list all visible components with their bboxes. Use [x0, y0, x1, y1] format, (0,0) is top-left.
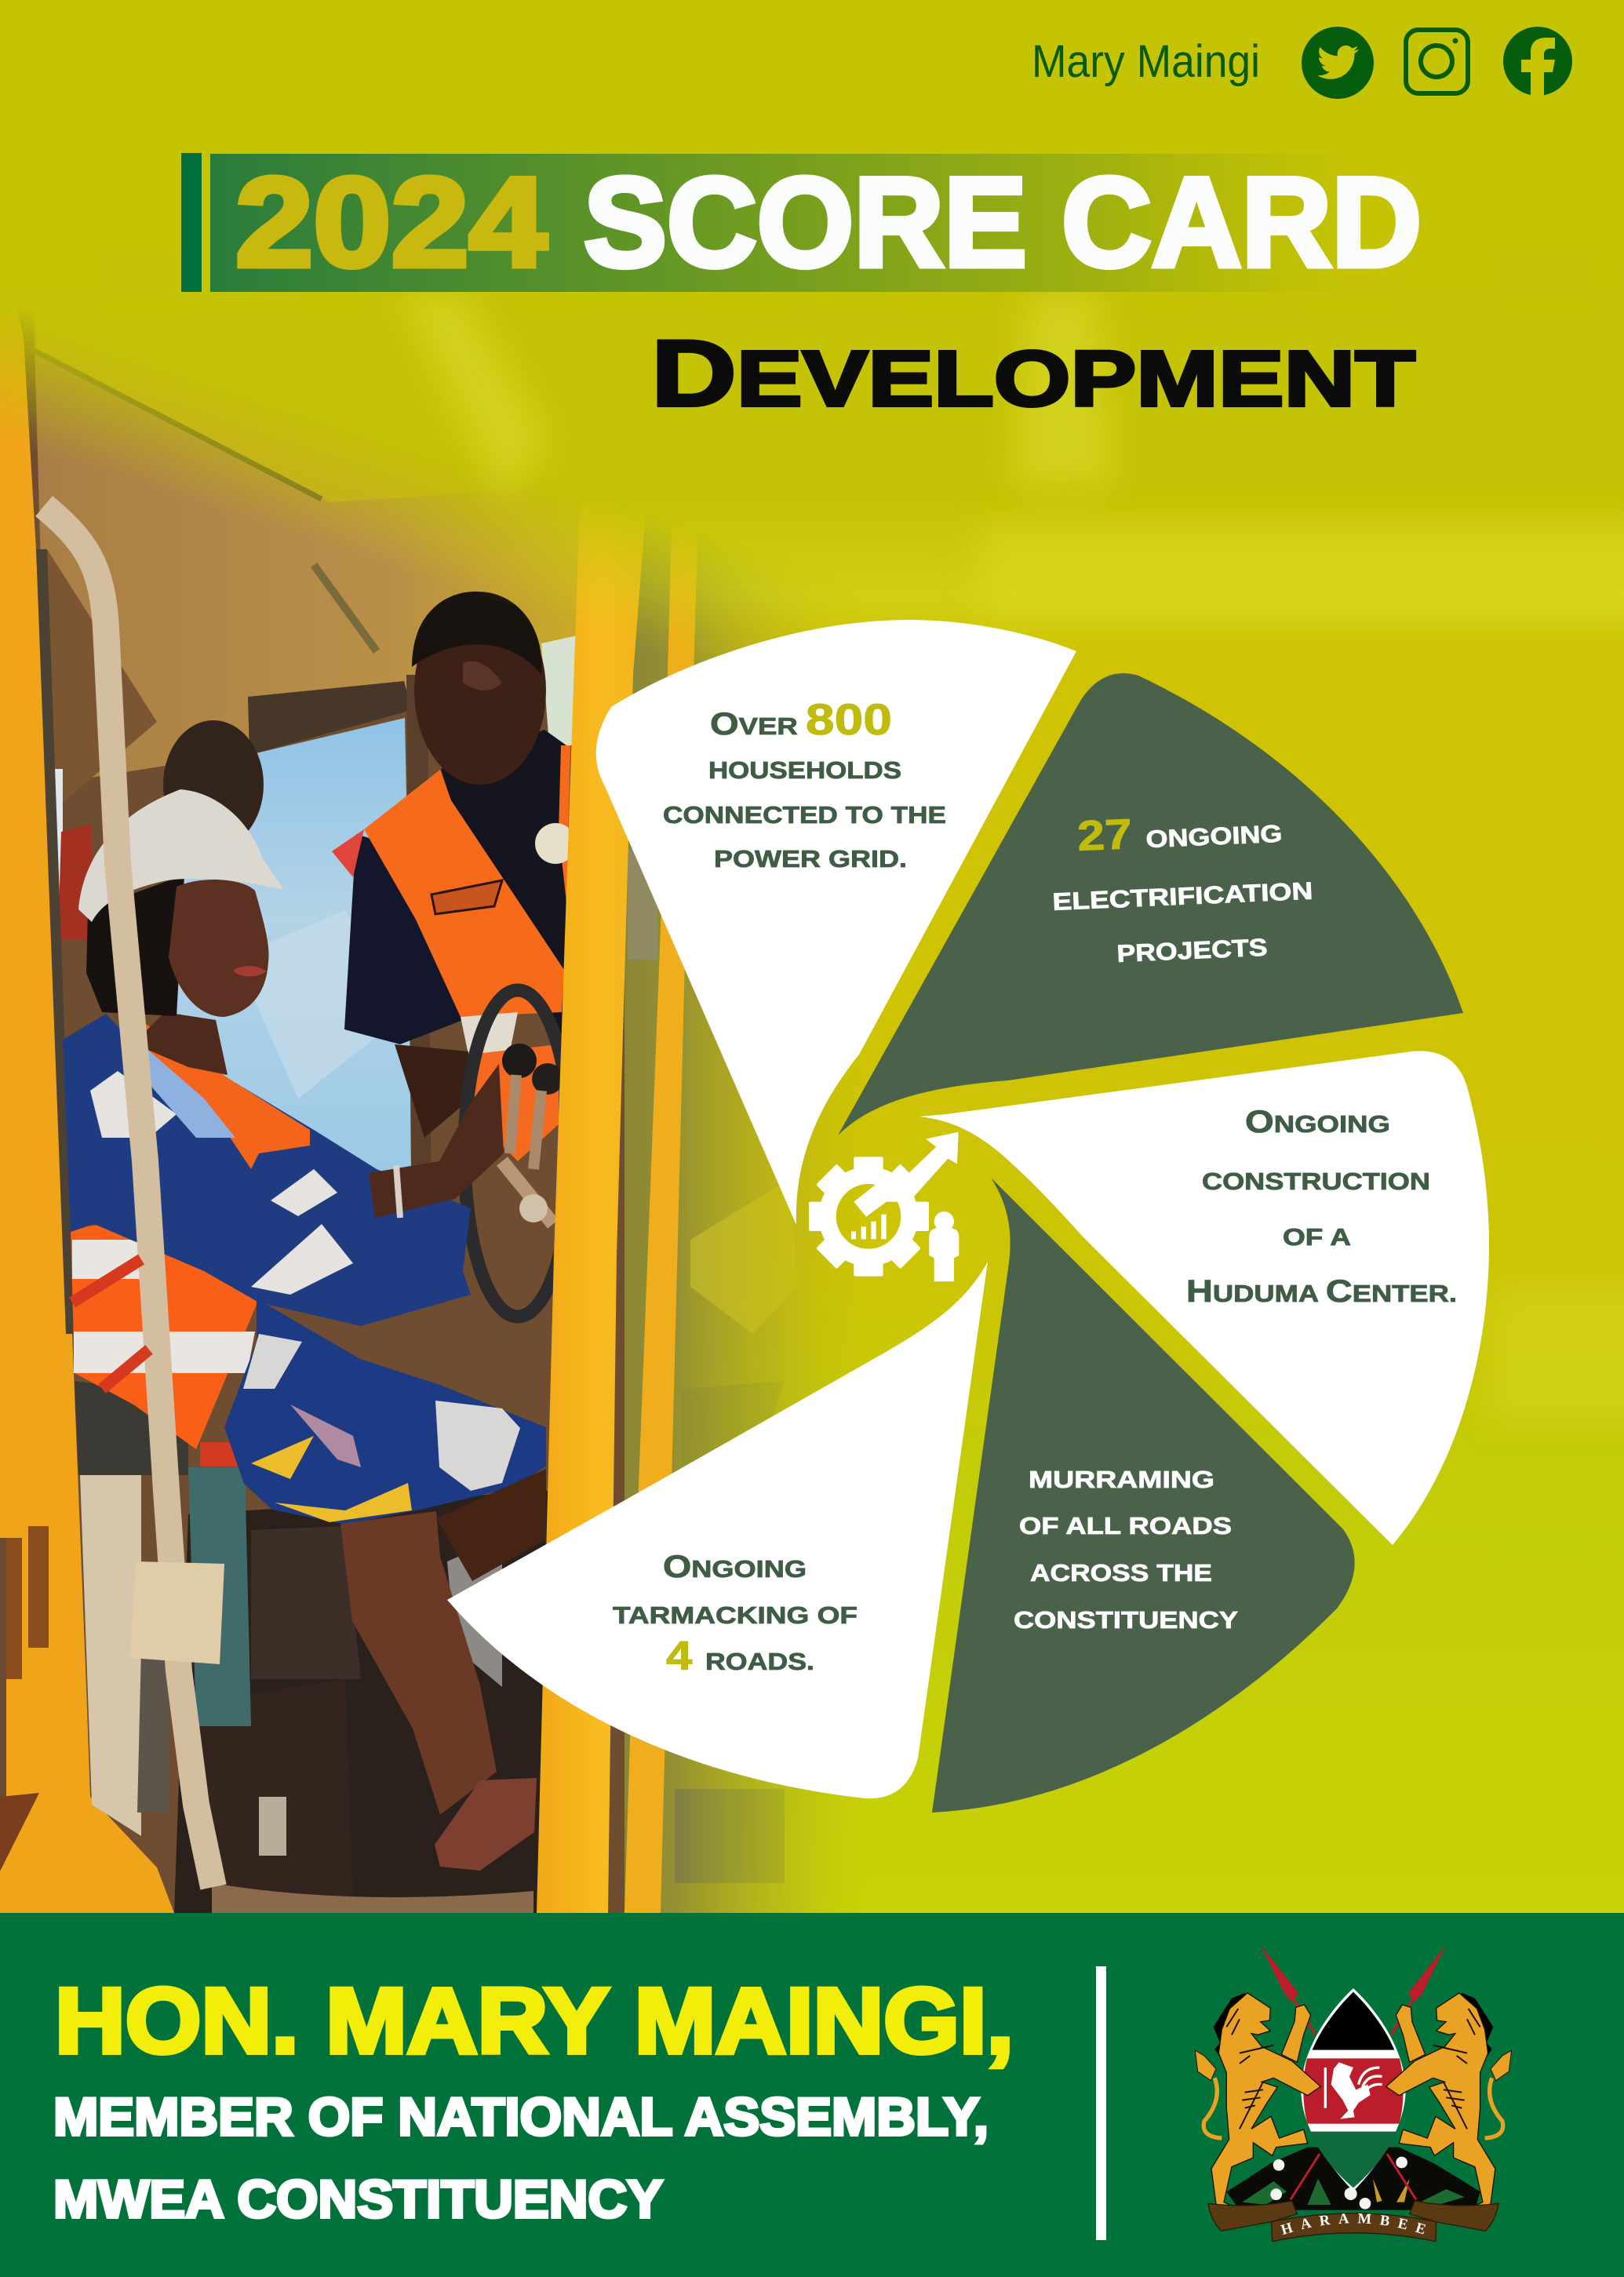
panel: murraming of roads: ACROSS THE [1030, 1559, 1212, 1587]
cab ceiling [35, 330, 581, 778]
icon: instagram [1406, 30, 1468, 93]
panel: households connected: HOUSEHOLDS [708, 756, 901, 784]
green bottle [188, 1467, 251, 1726]
lion right [1386, 1993, 1512, 2208]
sky window [177, 718, 411, 1171]
footer role: MEMBER OF NATIONAL ASSEMBLY, [53, 2087, 989, 2147]
main yellow pole [537, 235, 667, 1913]
woman vest upper [133, 1017, 310, 1169]
title accent bar [181, 153, 202, 292]
hard hat [78, 789, 284, 922]
dress white flowers [90, 1071, 353, 1295]
mounting plate [130, 1561, 224, 1664]
title [235, 151, 1422, 293]
panel: households connected: OVER 800 [710, 694, 892, 744]
cab interior [0, 235, 628, 1915]
footer divider [1096, 1966, 1106, 2240]
vest badge [431, 880, 502, 914]
panel: tarmacking of roads: 4 ROADS. [666, 1634, 814, 1679]
woman arm [369, 1064, 504, 1218]
panel: tarmacking of roads: ONGOING [663, 1550, 807, 1584]
woman face [169, 880, 269, 1017]
left narrow window and red part [55, 769, 63, 896]
pale light beams [400, 292, 1114, 502]
footer band [0, 1913, 1624, 2277]
man [332, 592, 576, 1161]
background light bands [981, 522, 1624, 1420]
woman back leg [436, 1469, 546, 1581]
bracelet [396, 1165, 400, 1218]
panel: Huduma Center [919, 1051, 1489, 1545]
panel: tarmacking of roads: TARMACKING OF [613, 1601, 858, 1629]
rooster [1331, 2062, 1371, 2119]
left pillar [0, 235, 174, 1913]
panel: Huduma Center: ONGOING [1245, 1105, 1390, 1139]
torso vest lower [71, 1208, 259, 1449]
window frame [248, 681, 412, 755]
shield [1301, 1988, 1406, 2191]
panel: Huduma Center: HUDUMA CENTER. [1186, 1274, 1457, 1309]
under seat dark [174, 1491, 549, 1913]
woman neck and chest [133, 1012, 228, 1075]
title: SCORE CARD [584, 151, 1422, 293]
thin yellow pole [624, 471, 700, 1913]
dress torso [63, 1014, 471, 1326]
door frame [406, 675, 431, 1166]
panel: electrification projects [838, 673, 1463, 1135]
panel: tarmacking of roads [447, 1262, 988, 1798]
title band [210, 154, 1345, 292]
ground mound [1226, 2148, 1480, 2210]
panel: murraming of roads: MURRAMING [1029, 1466, 1214, 1493]
footer constituency: MWEA CONSTITUENCY [53, 2170, 663, 2229]
man head [414, 596, 546, 785]
beige handle bar [44, 506, 213, 1887]
subtitle: Development: DEVELOPMENT [651, 321, 1415, 426]
man hair [412, 592, 541, 675]
spear right [1387, 1944, 1446, 2199]
icon: facebook [1503, 27, 1572, 96]
bottle cap [200, 1442, 239, 1466]
photo: woman and man in grader cab [0, 314, 820, 1913]
ribbon [1208, 2201, 1498, 2242]
steering wheel [464, 990, 571, 1317]
panel: Huduma Center: CONSTRUCTION [1202, 1168, 1430, 1195]
lion left [1195, 1993, 1320, 2208]
panel: murraming of roads [932, 1178, 1355, 1812]
lower cab panel [80, 1475, 141, 1836]
red lever [72, 1259, 149, 1389]
woman front leg [340, 1511, 497, 1815]
man arm [395, 1044, 471, 1138]
spears [1261, 1944, 1320, 2199]
woman shoe [435, 1778, 537, 1871]
social: Mary Maingi handle: Mary Maingi [1032, 36, 1260, 87]
man vest [364, 770, 564, 1017]
wire coil [163, 720, 264, 831]
woman hair [86, 875, 184, 1016]
icon: gear, growth arrow and person [809, 1132, 959, 1281]
panel: murraming of roads: OF ALL ROADS [1019, 1512, 1232, 1539]
panel: electrification projects: ELECTRIFICATION [1052, 877, 1313, 916]
title: 2024 [235, 151, 547, 293]
panel: murraming of roads: CONSTITUENCY [1014, 1606, 1238, 1634]
woman skirt [224, 1299, 546, 1525]
panel: electrification projects: PROJECTS [1116, 934, 1268, 967]
panel: electrification projects: 27 ONGOING [1076, 804, 1283, 860]
levers [502, 1044, 563, 1224]
plants [1242, 2157, 1465, 2210]
panel: households connected [596, 620, 1076, 1225]
icon: twitter [1302, 27, 1374, 99]
icon: Kenya coat of arms [1194, 1944, 1513, 2242]
motto: HARAMBEE [1280, 2213, 1426, 2235]
panel: households connected: CONNECTED TO THE [663, 801, 946, 829]
footer name: HON. MARY MAINGI, [55, 1969, 1014, 2073]
panel: Huduma Center: OF A [1283, 1223, 1351, 1251]
skirt flowers [243, 1334, 520, 1491]
man sleeve [344, 834, 463, 1044]
door muddy glass [624, 235, 891, 1915]
woman [63, 789, 546, 1871]
man chest [441, 730, 566, 1051]
panel: households connected: POWER GRID. [714, 845, 907, 873]
